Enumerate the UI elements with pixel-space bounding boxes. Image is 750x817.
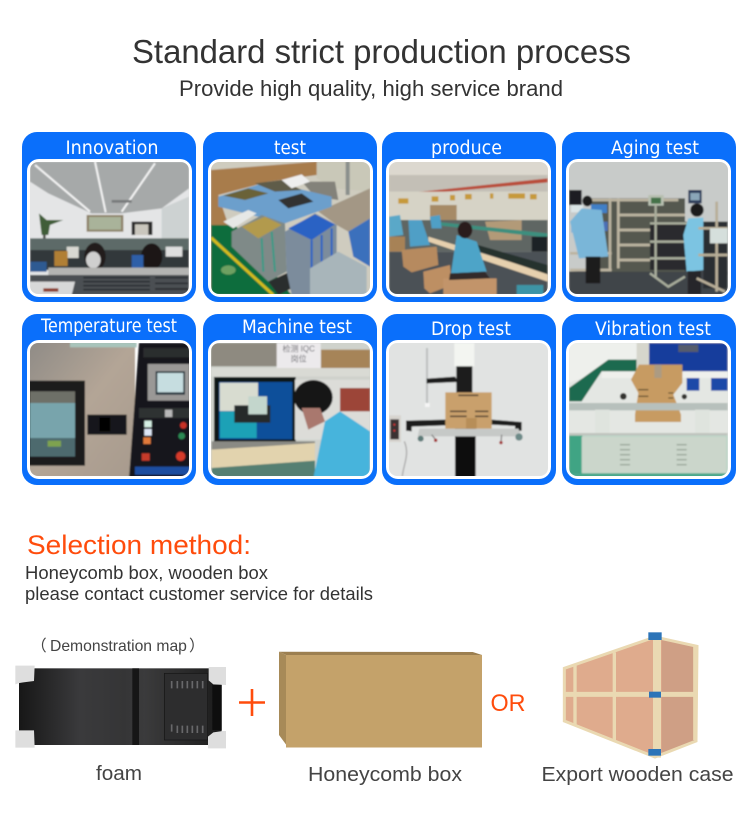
photo: climate chamber [28, 341, 190, 478]
note: demonstration map: Demonstration map [50, 638, 187, 655]
label: Drop test: Drop test [431, 319, 511, 340]
image: screen in foam corners [15, 666, 226, 748]
panel: Machine test [203, 314, 377, 485]
panel: Drop test [382, 314, 556, 485]
panel: Vibration test [562, 314, 736, 485]
panel: test [203, 132, 377, 302]
panel: produce [382, 132, 556, 302]
photo: vibration table [567, 341, 730, 478]
subtitle: Provide high quality, high service brand [179, 76, 563, 101]
note: demonstration map: ） [189, 638, 205, 655]
title: Standard strict production process [132, 33, 631, 70]
panel: Temperature test [22, 314, 196, 485]
icon: plus [239, 689, 265, 716]
caption: honeycomb box: Honeycomb box [308, 764, 462, 786]
label: test: test [274, 138, 306, 159]
label: Temperature test: Temperature test [40, 316, 177, 337]
photo: aging racks [567, 160, 730, 297]
heading: selection method: Selection method: [27, 530, 251, 560]
note: demonstration map: （ [31, 638, 47, 655]
label: Aging test: Aging test [611, 138, 699, 159]
label: Innovation: Innovation [66, 138, 158, 159]
panel: Innovation [22, 132, 196, 302]
text: packaging options: Honeycomb box, wooden box [25, 563, 268, 583]
photo: monitor testing [208, 341, 372, 478]
photo: monitor testing: 检测 IQC [282, 343, 315, 353]
panel: Aging test [562, 132, 736, 302]
photo: office [28, 160, 192, 297]
label: Machine test: Machine test [242, 317, 352, 338]
image: export wooden crate [564, 632, 697, 758]
image: honeycomb box [279, 652, 482, 748]
label: produce: produce [431, 138, 502, 159]
photo: drop tester [387, 341, 550, 478]
caption: export wooden case: Export wooden case [542, 764, 734, 786]
photo: assembly line [387, 160, 550, 297]
label: OR: OR [490, 690, 526, 717]
photo: battery stacks [208, 160, 372, 297]
text: contact note: please contact customer service for details [25, 584, 373, 604]
caption: foam: foam [96, 763, 142, 785]
photo: monitor testing: 岗位 [291, 353, 307, 363]
label: Vibration test: Vibration test [595, 319, 711, 340]
